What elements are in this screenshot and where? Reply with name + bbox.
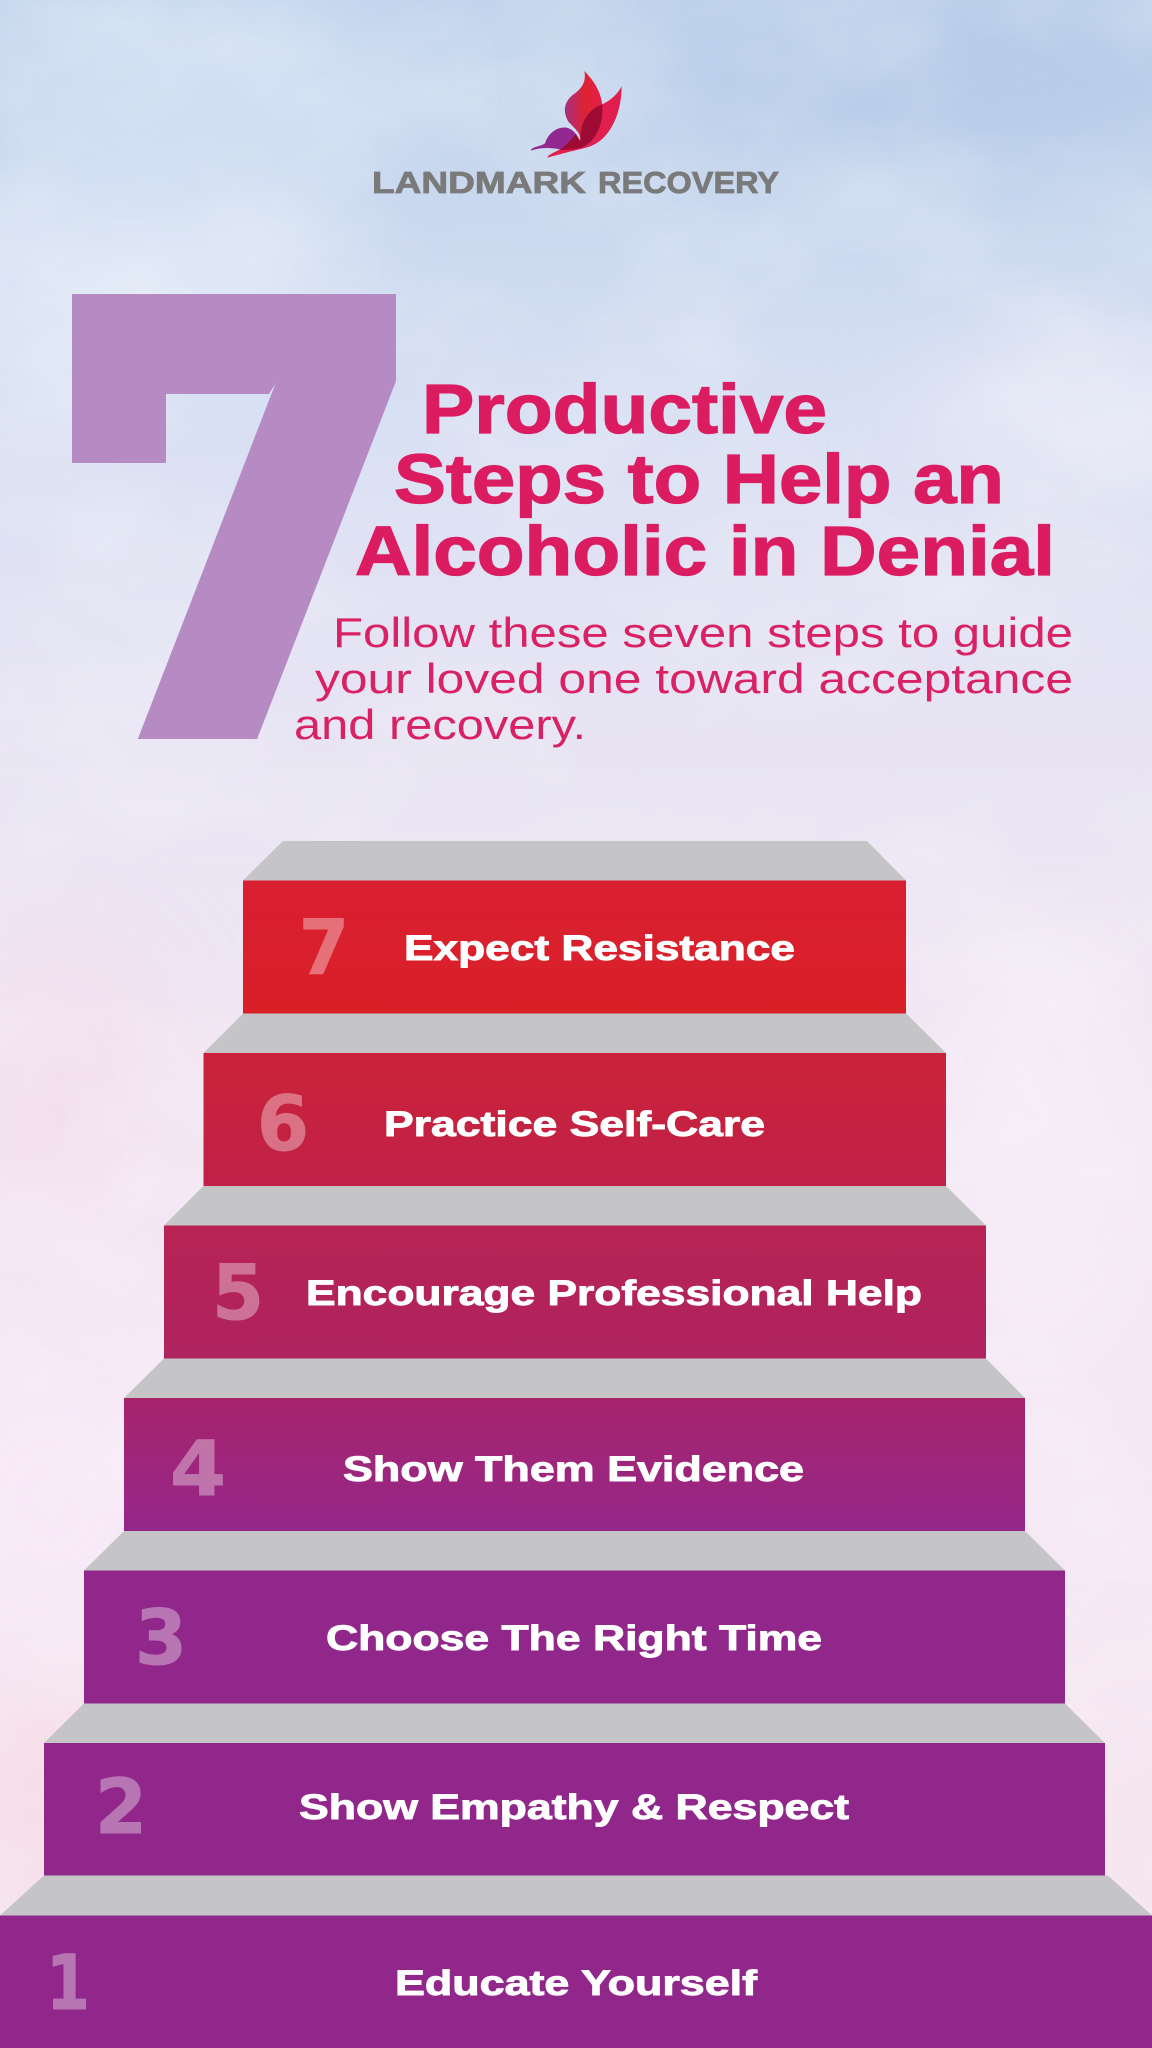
step 5	[164, 1186, 986, 1358]
step 1	[0, 1876, 1152, 2048]
step 2: 2	[95, 1762, 147, 1851]
step 2	[44, 1704, 1105, 1876]
step 7: Expect Resistance	[404, 929, 795, 968]
step 1: Educate Yourself	[395, 1964, 757, 2003]
title: Productive	[422, 370, 827, 448]
subtitle: your loved one toward acceptance	[315, 655, 1073, 702]
title: Steps to Help an	[394, 440, 1004, 518]
step 5: Encourage Professional Help	[306, 1274, 922, 1313]
logo wordmark	[372, 165, 779, 200]
step 6: 6	[257, 1079, 309, 1168]
step 4: 4	[170, 1424, 226, 1513]
logo wordmark: LANDMARK	[372, 165, 587, 200]
step 7	[243, 841, 906, 1014]
step 3: Choose The Right Time	[326, 1619, 822, 1658]
step 5: 5	[212, 1248, 264, 1337]
large numeral 7	[72, 294, 396, 739]
subtitle: Follow these seven steps to guide	[333, 609, 1073, 656]
logo: Landmark Recovery	[372, 71, 779, 200]
title: Alcoholic in Denial	[355, 512, 1055, 590]
step 4	[124, 1358, 1025, 1531]
staircase	[0, 841, 1152, 2048]
icon: butterfly	[531, 71, 622, 158]
step 3	[84, 1531, 1065, 1704]
step 2: Show Empathy & Respect	[299, 1788, 849, 1827]
step 3: 3	[135, 1593, 187, 1682]
logo wordmark: RECOVERY	[598, 165, 779, 200]
subtitle	[294, 609, 1073, 748]
step 4: Show Them Evidence	[343, 1450, 804, 1489]
large numeral 7: 7	[0, 174, 508, 884]
subtitle: and recovery.	[294, 701, 586, 748]
step 1: 1	[46, 1938, 90, 2027]
step 6: Practice Self-Care	[384, 1105, 765, 1144]
step 7: 7	[299, 903, 349, 992]
title	[355, 370, 1055, 590]
step 6	[204, 1014, 946, 1186]
